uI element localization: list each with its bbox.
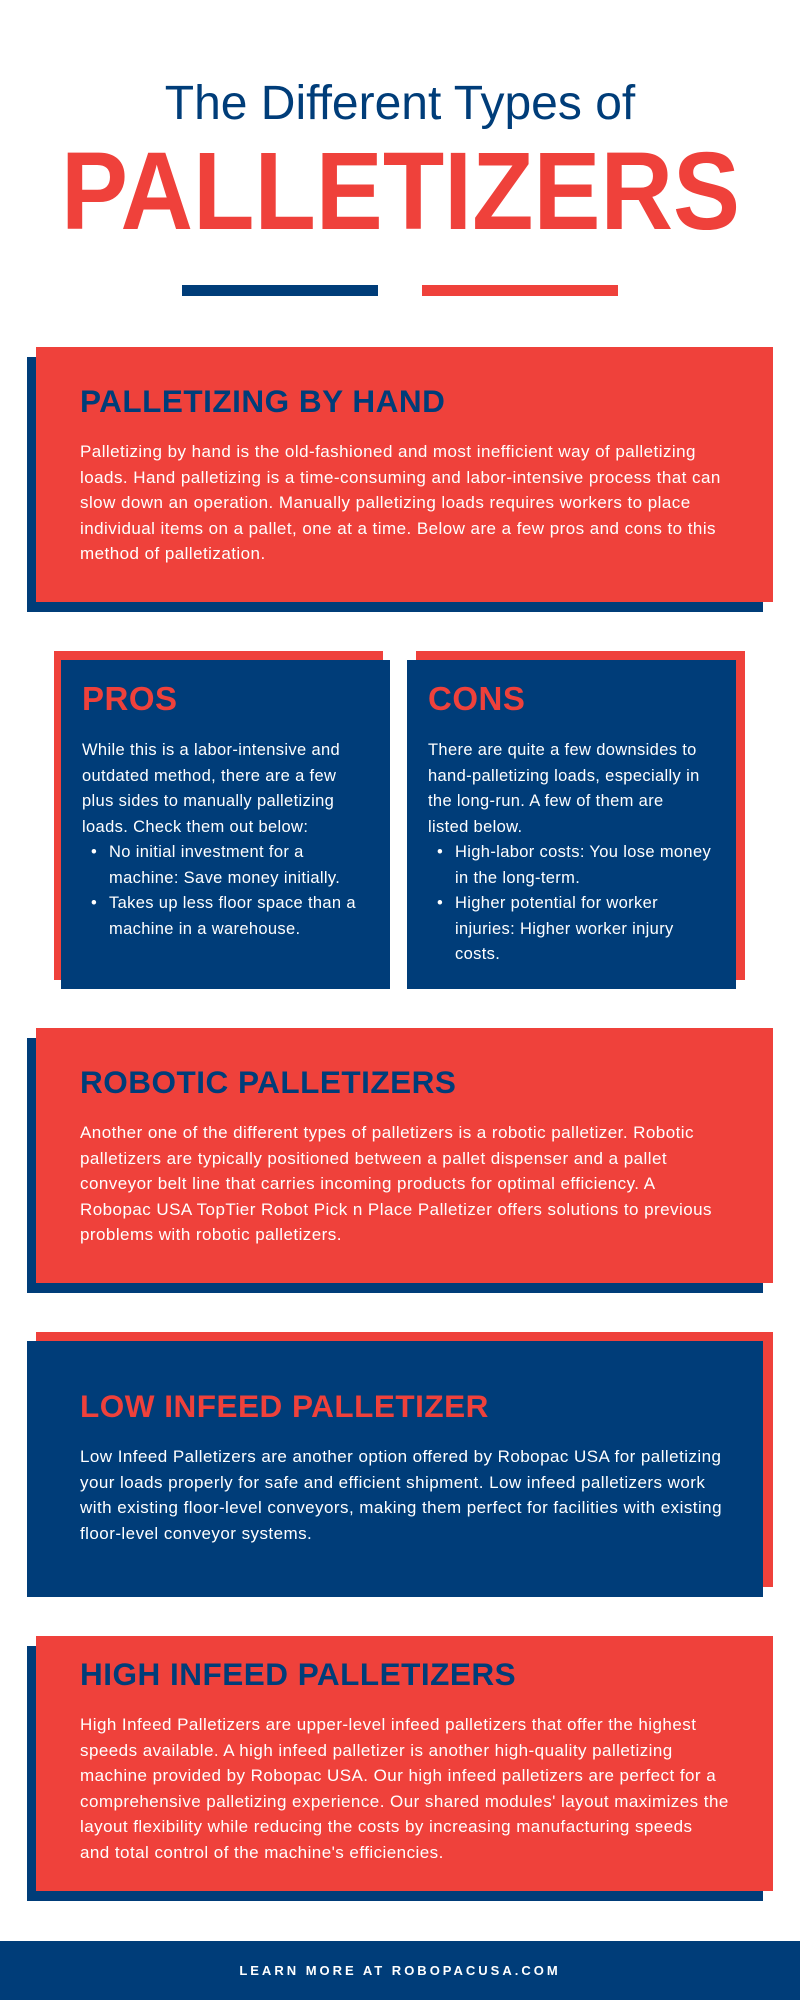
- body text: loads. Hand palletizing is a time-consuming and labor-intensive process that can: [80, 468, 721, 486]
- heading: PROS: [82, 680, 178, 717]
- body text: individual items on a pallet, one at a time. Below are a few pros and cons to this: [80, 518, 716, 538]
- body text: High Infeed Palletizers are upper-level infeed palletizers that offer the highest: [80, 1715, 696, 1734]
- body text: speeds available. A high infeed palletizer is another high-quality palletizing: [80, 1740, 673, 1760]
- heading: LOW INFEED PALLETIZER: [80, 1388, 489, 1424]
- heading: PALLETIZING BY HAND: [80, 383, 445, 419]
- body text: problems with robotic palletizers.: [80, 1225, 342, 1244]
- body text: [80, 1447, 722, 1542]
- body text: [80, 1123, 712, 1244]
- body text: hand-palletizing loads, especially in: [428, 766, 700, 784]
- panel: cons: [407, 651, 745, 989]
- body text: Takes up less floor space than a: [109, 894, 356, 912]
- body text: Higher potential for worker: [455, 894, 658, 912]
- body text: plus sides to manually palletizing: [82, 792, 334, 810]
- body text: Low Infeed Palletizers are another option offered by Robopac USA for palletizing: [80, 1447, 721, 1466]
- body text: machine provided by Robopac USA. Our high infeed palletizers are perfect for a: [80, 1766, 716, 1785]
- heading: HIGH INFEED PALLETIZERS: [80, 1656, 516, 1692]
- footer: [0, 1941, 800, 2000]
- subtitle: The Different Types of: [165, 77, 635, 130]
- body text: [80, 1715, 729, 1862]
- panel: low infeed palletizer: [27, 1332, 773, 1597]
- body text: costs.: [455, 945, 500, 963]
- body text: [80, 442, 721, 563]
- decorative bars: [182, 285, 618, 296]
- panel: pros: [54, 651, 390, 989]
- body text: loads. Check them out below:: [82, 818, 308, 836]
- panel: high infeed palletizers: [27, 1636, 773, 1901]
- body text: injuries: Higher worker injury: [455, 920, 674, 938]
- body text: [428, 741, 711, 963]
- body text: High-labor costs: You lose money: [455, 843, 711, 861]
- heading: CONS: [428, 680, 525, 717]
- body text: floor-level conveyor systems.: [80, 1524, 312, 1542]
- title: [61, 77, 740, 250]
- body text: Palletizing by hand is the old-fashioned and most inefficient way of palletizing: [80, 442, 696, 461]
- body text: the long-run. A few of them are: [428, 792, 664, 810]
- body text: Robopac USA TopTier Robot Pick n Place Palletizer offers solutions to previous: [80, 1200, 712, 1218]
- body text: Another one of the different types of palletizers is a robotic palletizer. Robotic: [80, 1123, 694, 1142]
- body text: [82, 741, 356, 938]
- panel: palletizing by hand: [27, 347, 773, 612]
- body text: layout flexibility while reducing the costs by increasing manufacturing speeds: [80, 1817, 692, 1836]
- body text: your loads properly for safe and efficient shipment. Low infeed palletizers work: [80, 1472, 705, 1492]
- body text: machine: Save money initially.: [109, 868, 340, 886]
- body text: There are quite a few downsides to: [428, 741, 697, 759]
- body text: While this is a labor-intensive and: [82, 741, 340, 759]
- body text: listed below.: [428, 818, 522, 836]
- body text: conveyor belt line that carries incoming products for optimal efficiency. A: [80, 1174, 656, 1193]
- body text: and total control of the machine's efficiencies.: [80, 1842, 444, 1862]
- body text: palletizers are typically positioned between a pallet dispenser and a pallet: [80, 1148, 667, 1168]
- body text: No initial investment for a: [109, 843, 304, 861]
- body text: slow down an operation. Manually palletizing loads requires workers to place: [80, 493, 691, 512]
- panel: robotic palletizers: [27, 1028, 773, 1293]
- body text: with existing floor-level conveyors, making them perfect for facilities with existing: [80, 1498, 722, 1517]
- body text: method of palletization.: [80, 544, 266, 563]
- heading: ROBOTIC PALLETIZERS: [80, 1064, 456, 1100]
- body text: outdated method, there are a few: [82, 766, 336, 784]
- body text: comprehensive palletizing experience. Our shared modules' layout maximizes the: [80, 1792, 729, 1810]
- body text: machine in a warehouse.: [109, 920, 300, 938]
- body text: in the long-term.: [455, 868, 580, 886]
- footer: LEARN MORE AT ROBOPACUSA.COM: [239, 1963, 561, 1978]
